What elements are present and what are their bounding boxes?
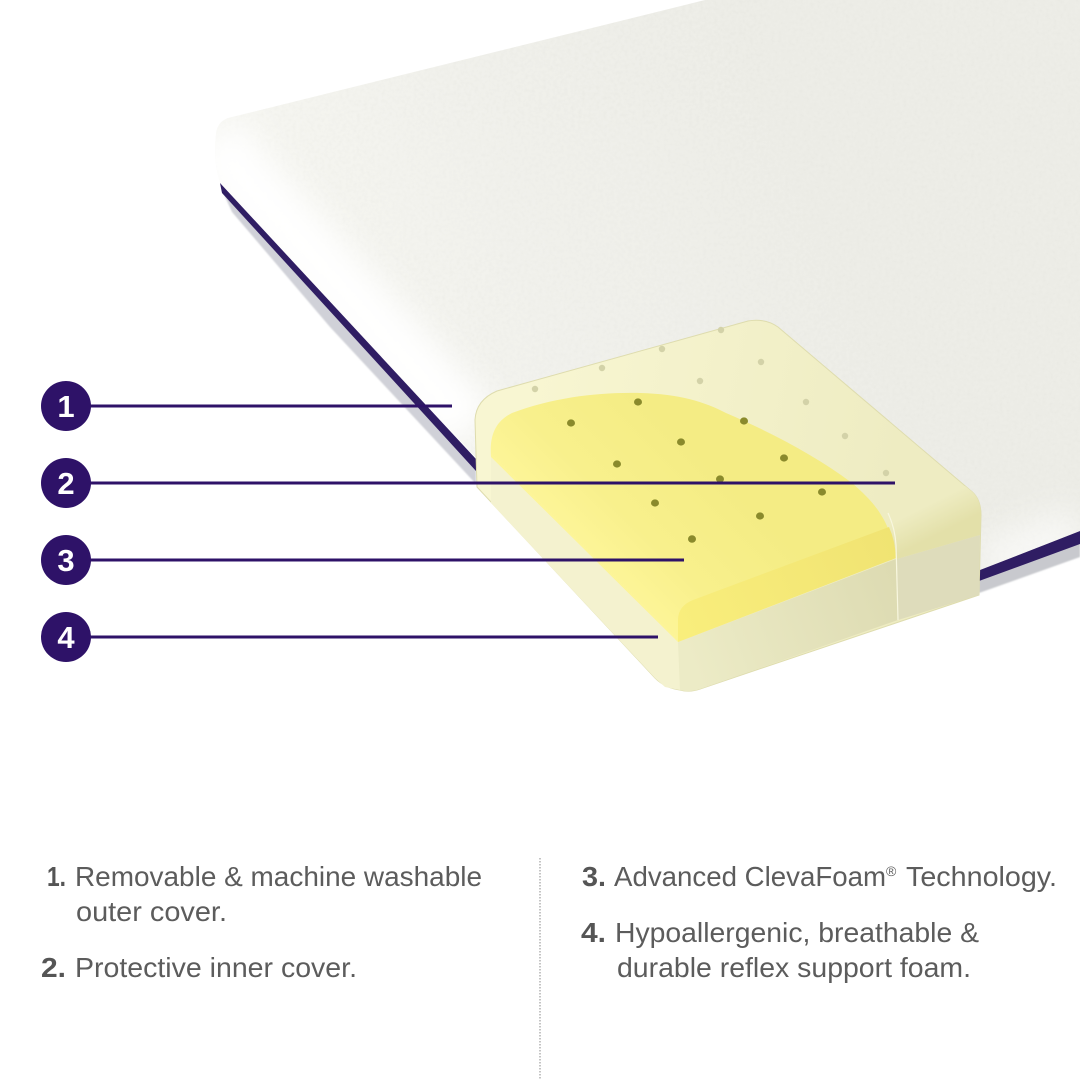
mattress: [210, 0, 1080, 593]
legend item 1: outer cover.: [76, 896, 227, 927]
ventilation holes under pale shell: [532, 327, 889, 476]
legend item 4: [581, 917, 979, 983]
leader line 3: [80, 558, 684, 562]
legend item 1: 1.: [47, 861, 66, 892]
legend column left: [41, 861, 482, 983]
leader line 4: [80, 636, 658, 638]
legend item 3: Technology.: [906, 861, 1057, 892]
legend item 4: 4.: [581, 917, 606, 948]
legend item 1: [47, 861, 482, 927]
marker 2: [41, 458, 91, 508]
fabric texture: [210, 0, 1080, 580]
legend column right: [581, 861, 1057, 983]
callout 3: [41, 535, 684, 585]
cutaway foam block: [475, 320, 981, 691]
yellow memory foam top face: [491, 393, 896, 642]
marker 3: [41, 535, 91, 585]
marker number 1: 1: [57, 389, 75, 424]
dotted divider: [539, 858, 541, 1080]
navy piping, right side: [979, 530, 1080, 581]
marker number 2: 2: [57, 466, 75, 501]
highlighted front edge of mattress: [215, 135, 1080, 565]
legend item 2: 2.: [41, 952, 66, 983]
legend item 4: durable reflex support foam.: [617, 952, 971, 983]
marker number 4: 4: [57, 620, 75, 655]
upper front of wrap band: [889, 486, 981, 559]
callout 1: [41, 381, 452, 431]
yellow memory foam front face: [678, 527, 896, 642]
leader line 1: [80, 404, 452, 408]
navy piping, left side: [220, 183, 476, 471]
left side of lower foam: [491, 457, 680, 690]
marker 4: [41, 612, 91, 662]
lower front of wrap band: [897, 535, 980, 620]
grey base fabric, left side: [222, 190, 476, 484]
legend item 1: Removable & machine washable: [75, 861, 482, 892]
legend item 3: ®: [886, 863, 897, 879]
legend item 3: 3.: [582, 861, 606, 892]
marker number 3: 3: [57, 543, 75, 578]
callout 2: [41, 458, 895, 508]
marker 1: [41, 381, 91, 431]
leader line 2: [80, 482, 895, 484]
pale wrap edge line: [888, 513, 898, 620]
front face of lower foam: [678, 559, 898, 691]
ventilation holes in yellow foam: [567, 398, 826, 543]
legend item 4: Hypoallergenic, breathable &: [615, 917, 979, 948]
legend item 3: [582, 861, 1057, 892]
callout 4: [41, 612, 658, 662]
grey base fabric, right side: [979, 538, 1080, 593]
legend item 2: Protective inner cover.: [75, 952, 357, 983]
mattress top surface: [215, 0, 1080, 570]
translucent outer shell: [475, 320, 981, 691]
legend item 3: Advanced ClevaFoam: [614, 861, 886, 892]
